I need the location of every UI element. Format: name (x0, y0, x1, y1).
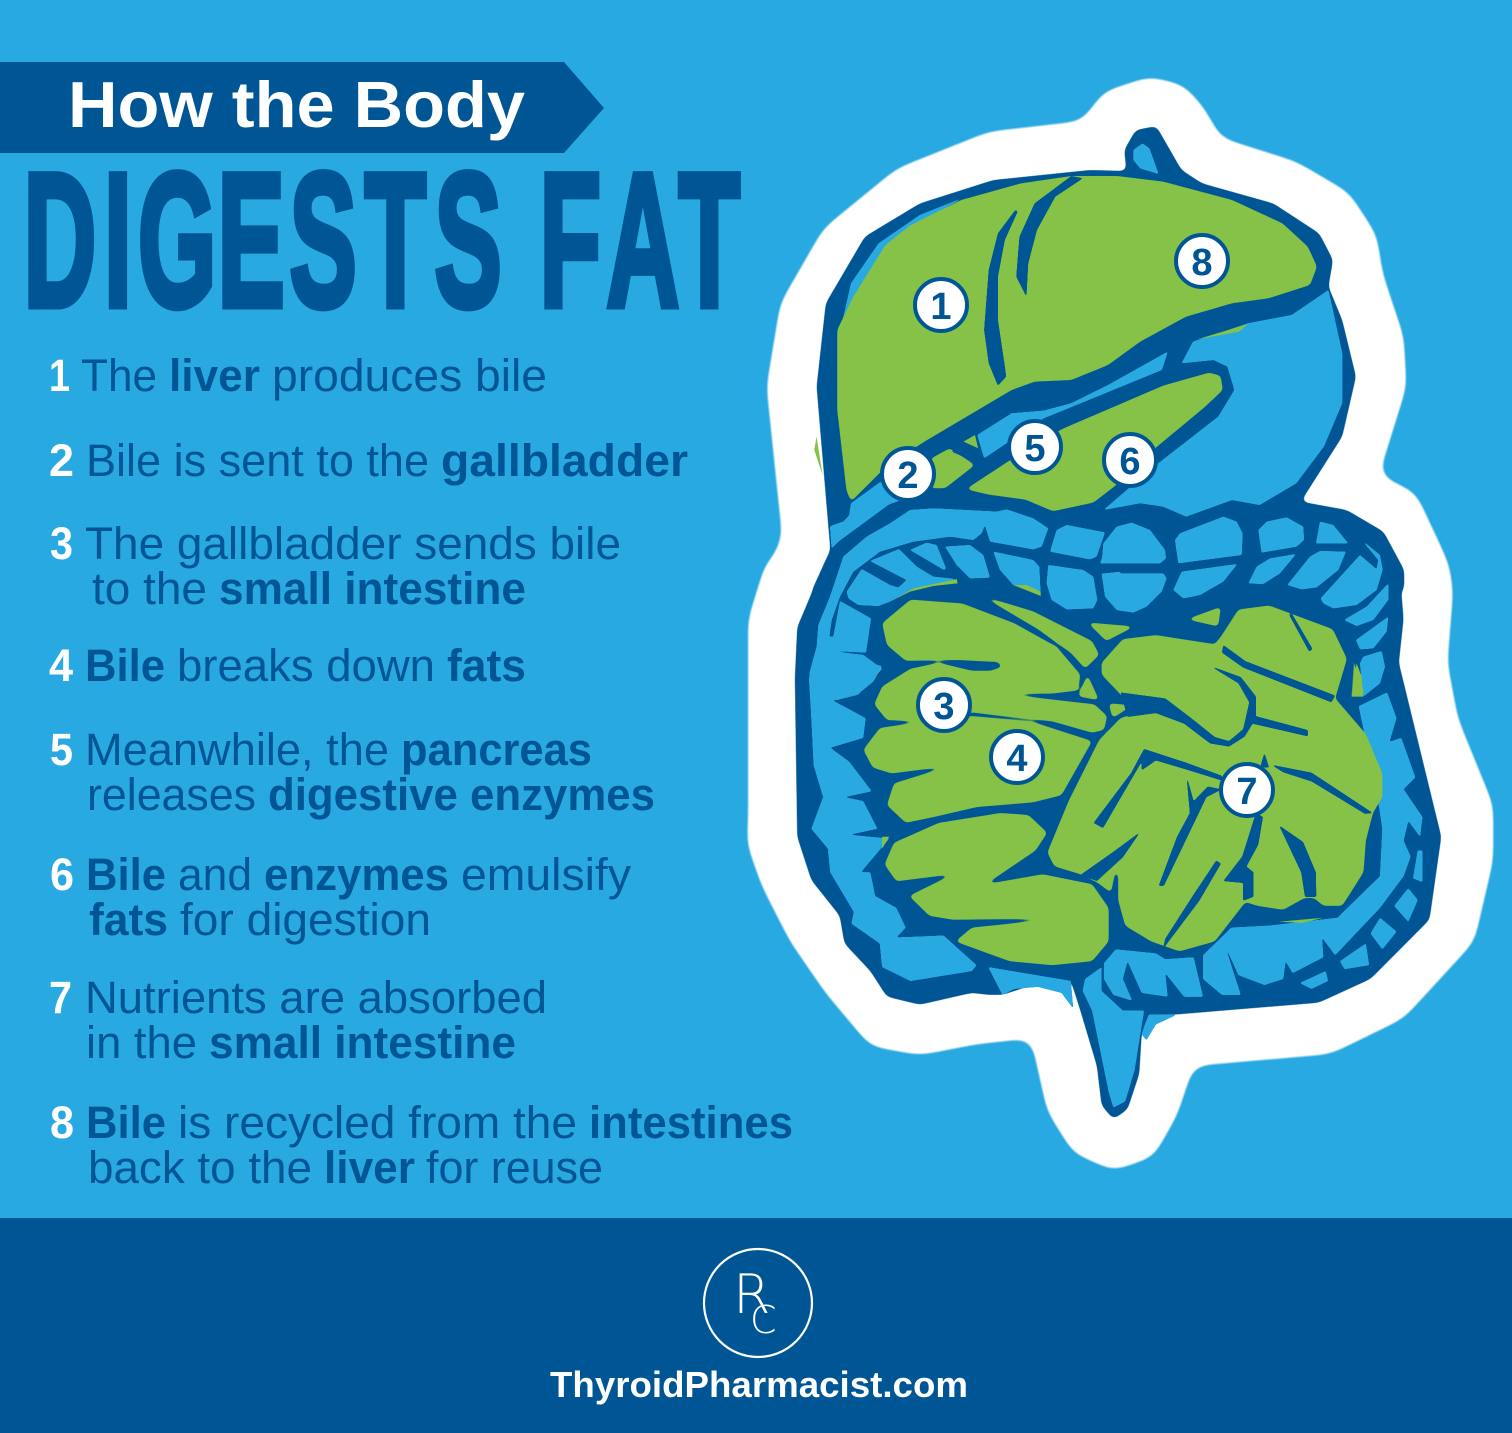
step 1: 1 (49, 350, 70, 401)
title banner: How the Body (68, 68, 525, 141)
step 7: small intestine (209, 1017, 516, 1068)
marker 2: 2 (897, 455, 919, 497)
step 2 (49, 435, 688, 486)
main heading: DIGESTS FAT (23, 135, 740, 347)
marker 1 (915, 279, 967, 331)
intestine folds (1080, 612, 1373, 949)
marker 3 (918, 679, 970, 731)
step 4 (49, 640, 526, 691)
step 8: intestines (589, 1097, 793, 1148)
step 6: 6 (50, 849, 74, 900)
marker 6: 6 (1119, 441, 1141, 483)
step 6: for digestion (180, 894, 431, 945)
step 7 (49, 972, 547, 1068)
logo (704, 1249, 812, 1357)
marker 2 (882, 448, 934, 500)
step 8: Bile (86, 1097, 166, 1148)
marker 8 (1176, 235, 1228, 287)
step 1: The (81, 350, 157, 401)
step 5: Meanwhile, the (85, 724, 389, 775)
step 3: small intestine (219, 563, 526, 614)
green slivers (814, 324, 1363, 923)
colon segments, left (809, 500, 1133, 700)
step 5: digestive enzymes (268, 769, 655, 820)
step 8 (50, 1097, 793, 1193)
marker 5 (1009, 421, 1061, 473)
marker 7: 7 (1236, 771, 1258, 813)
step 6: enzymes (264, 849, 449, 900)
step 4: 4 (49, 640, 73, 691)
step 5: releases (87, 769, 256, 820)
step 1: liver (169, 350, 260, 401)
body silhouette (795, 126, 1441, 1119)
step 8: for reuse (426, 1142, 603, 1193)
step 3: The gallbladder sends bile (85, 518, 621, 569)
logo: C (750, 1298, 777, 1342)
digestive system illustration (747, 77, 1493, 1171)
step 7: Nutrients are absorbed (85, 972, 547, 1023)
number markers (882, 235, 1273, 816)
step 1 (49, 350, 547, 401)
colon segments, lower (809, 651, 1422, 1107)
colon segments, right (1102, 517, 1388, 697)
steps list (49, 350, 793, 1193)
gallbladder (931, 448, 975, 488)
step 2: Bile is sent to the (86, 435, 429, 486)
step 2: gallbladder (441, 435, 688, 486)
step 5 (50, 724, 655, 820)
small intestine loops (863, 596, 1382, 965)
step 2: 2 (49, 435, 74, 486)
step 3: 3 (50, 518, 73, 569)
marker 8: 8 (1191, 242, 1213, 284)
white sticker outline (747, 77, 1493, 1171)
small sliver at top of intestine (1352, 663, 1363, 696)
marker 1: 1 (930, 286, 952, 328)
marker 4: 4 (1006, 738, 1028, 780)
step 6: Bile (86, 849, 166, 900)
website url: ThyroidPharmacist.com (550, 1364, 968, 1405)
pancreas (966, 373, 1223, 511)
step 3 (50, 518, 621, 614)
step 6: and (178, 849, 252, 900)
step 4: breaks down (177, 640, 435, 691)
marker 7 (1221, 764, 1273, 816)
stomach and duct cavities (840, 143, 1342, 518)
step 8: liver (324, 1142, 415, 1193)
step 8: back to the (88, 1142, 312, 1193)
step 1: produces bile (272, 350, 547, 401)
step 6: fats (89, 894, 168, 945)
marker 5: 5 (1024, 428, 1046, 470)
step 4: fats (447, 640, 526, 691)
light blue cavities (809, 143, 1422, 1107)
fold lines (952, 176, 1373, 949)
step 7: in the (86, 1017, 197, 1068)
liver, gallbladder, pancreas and small intestine (837, 176, 1382, 965)
marker 3: 3 (933, 686, 955, 728)
step 7: 7 (49, 972, 72, 1023)
step 6 (50, 849, 632, 945)
title banner (0, 62, 604, 153)
footer band (0, 1218, 1512, 1433)
step 4: Bile (85, 640, 165, 691)
logo: R (733, 1263, 771, 1326)
step 5: 5 (50, 724, 73, 775)
liver (837, 176, 1317, 502)
step 8: is recycled from the (178, 1097, 577, 1148)
step 8: 8 (50, 1097, 74, 1148)
step 6: emulsify (461, 849, 632, 900)
marker 4 (991, 731, 1043, 783)
step 3: to the (92, 563, 207, 614)
step 5: pancreas (401, 724, 592, 775)
marker 6 (1104, 434, 1156, 486)
liver folds (952, 176, 1083, 468)
